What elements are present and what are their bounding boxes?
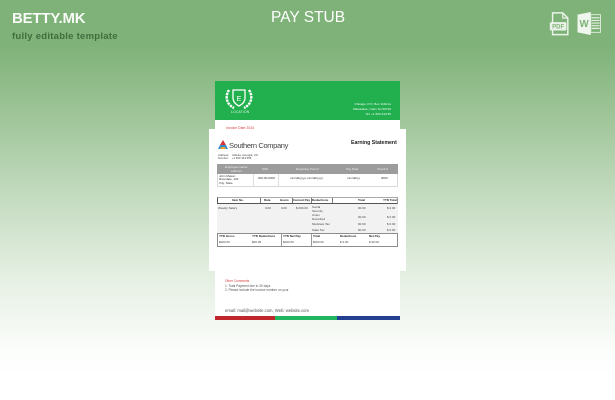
header labels [232,198,397,202]
header labels: Rate [264,198,271,202]
earnings table body [217,204,398,233]
summary labels: YTD Deductions [252,234,275,238]
employee header labels: Address [231,168,242,172]
employee header labels: Reporting Period [296,167,319,171]
summary values: $000.00 [313,240,324,244]
summary values: $ 0.00 [340,240,348,244]
earnings row text: 0.00 [281,206,287,210]
front document: earning statement [209,129,406,271]
company address small: Number: +1 500 444 555 [218,156,251,160]
other comments: 1. Total Payment due in 30 days [225,284,270,288]
employee row values: City, State [219,181,233,185]
summary labels: Deductions [340,234,356,238]
earnings row text: $ 0.00 [387,206,395,210]
tagline: fully editable template [12,31,118,42]
icon: shield and laurel emblem: E [237,96,242,103]
employee info table [217,164,398,187]
header labels: Deductions [312,198,328,202]
company address: Chicago, P.O. Box 110kms [354,102,391,106]
summary values: $ 00.00 [369,240,379,244]
title: PAY STUB [271,9,345,26]
summary labels: Total [313,234,320,238]
emblem caption: LOCATION [231,110,249,114]
employee header labels: Employee name/ [225,165,248,169]
summary labels: YTD Net Pay [283,234,301,238]
earnings row text [218,205,396,232]
other comments: Other Comments [225,279,249,283]
icon: company logo [218,140,228,149]
icon: word file [578,12,601,35]
footer colour stripe [215,316,400,320]
header labels: Current Pay [293,198,310,202]
statement title: Earning Statement [351,140,397,146]
earnings row text: Social [312,205,320,209]
company address: Tel: +1 500 444 55 [365,112,391,116]
summary labels [219,234,380,238]
contact line: email: mail@website.com, Web: website.com [225,308,309,313]
earnings table [217,197,398,233]
summary totals box [217,233,398,247]
letterhead green band [215,81,400,120]
column divider [311,234,312,246]
icon: pdf file: PDF [552,25,564,31]
earnings row text: Union [312,213,320,217]
summary labels: Net Pay [369,234,380,238]
company name: Southern Company [229,141,288,150]
header labels: YTD Total [383,198,397,202]
earnings row text: $ 000.00 [296,206,308,210]
earnings row text: Security [312,208,323,212]
earnings table header [217,197,398,204]
summary values: $000.00 [219,240,230,244]
summary labels: YTD Gross [219,234,235,238]
employee row values: Riverdale, 123 [219,177,238,181]
header divider [260,198,261,203]
header divider [332,198,333,203]
employee header labels: SSN [262,167,268,171]
summary values: $00.00 [252,240,261,244]
company address: Milwaukee, Carlo So 50749 [353,107,391,111]
earnings row text: Weekly Salary [218,206,237,210]
column divider [278,174,279,187]
other comments [225,279,289,292]
earnings row text: 0.00 [265,206,271,210]
summary values [219,240,379,244]
icon: word file: W [580,19,590,30]
header labels: Item No. [232,198,244,202]
other comments: 2. Please include the invoice number on your [225,288,289,292]
employee row values [219,174,388,185]
earnings row text: Dues/Fed [312,216,325,220]
column divider [281,234,282,246]
earnings row text: 00.00 [358,228,366,232]
earnings row text: 00.00 [358,206,366,210]
header divider [311,198,312,203]
earnings row text: State Tax [312,228,324,232]
summary values: $000.00 [283,240,294,244]
company address small [218,153,258,160]
earnings row text: 00.00 [358,215,366,219]
employee row values: mm/dd/yyyy-mm/dd/yyyy [290,176,323,180]
brand logo: BETTY.MK [12,10,85,27]
earnings row text: 00.00 [358,222,366,226]
company address small: Address: Atlanta, Georgia, US [218,153,258,157]
header labels: Hours [280,198,289,202]
header labels: Total [358,198,365,202]
header divider [292,198,293,203]
earnings row text: $ 0.00 [387,228,395,232]
company address [353,102,391,116]
employee table header [217,164,398,174]
employee row values: mm/dd/yy [347,176,360,180]
earnings row text: $ 0.00 [387,222,395,226]
employee row values: 000-00-0000 [258,176,275,180]
red document label: Invoice Date 2024 [226,126,254,130]
icon: shield and laurel emblem [226,89,252,110]
employee row values: John Mason [219,174,235,178]
employee header labels [225,165,388,172]
earnings row text: $ 0.00 [387,215,395,219]
column divider [253,174,254,187]
employee header labels: Pay Date [346,167,358,171]
employee header labels: Check # [377,167,388,171]
employee row values: 0000 [381,176,388,180]
earnings row text: Medicare Tax [312,222,330,226]
icon: pdf file [550,12,569,36]
back document: letterhead [215,81,400,320]
